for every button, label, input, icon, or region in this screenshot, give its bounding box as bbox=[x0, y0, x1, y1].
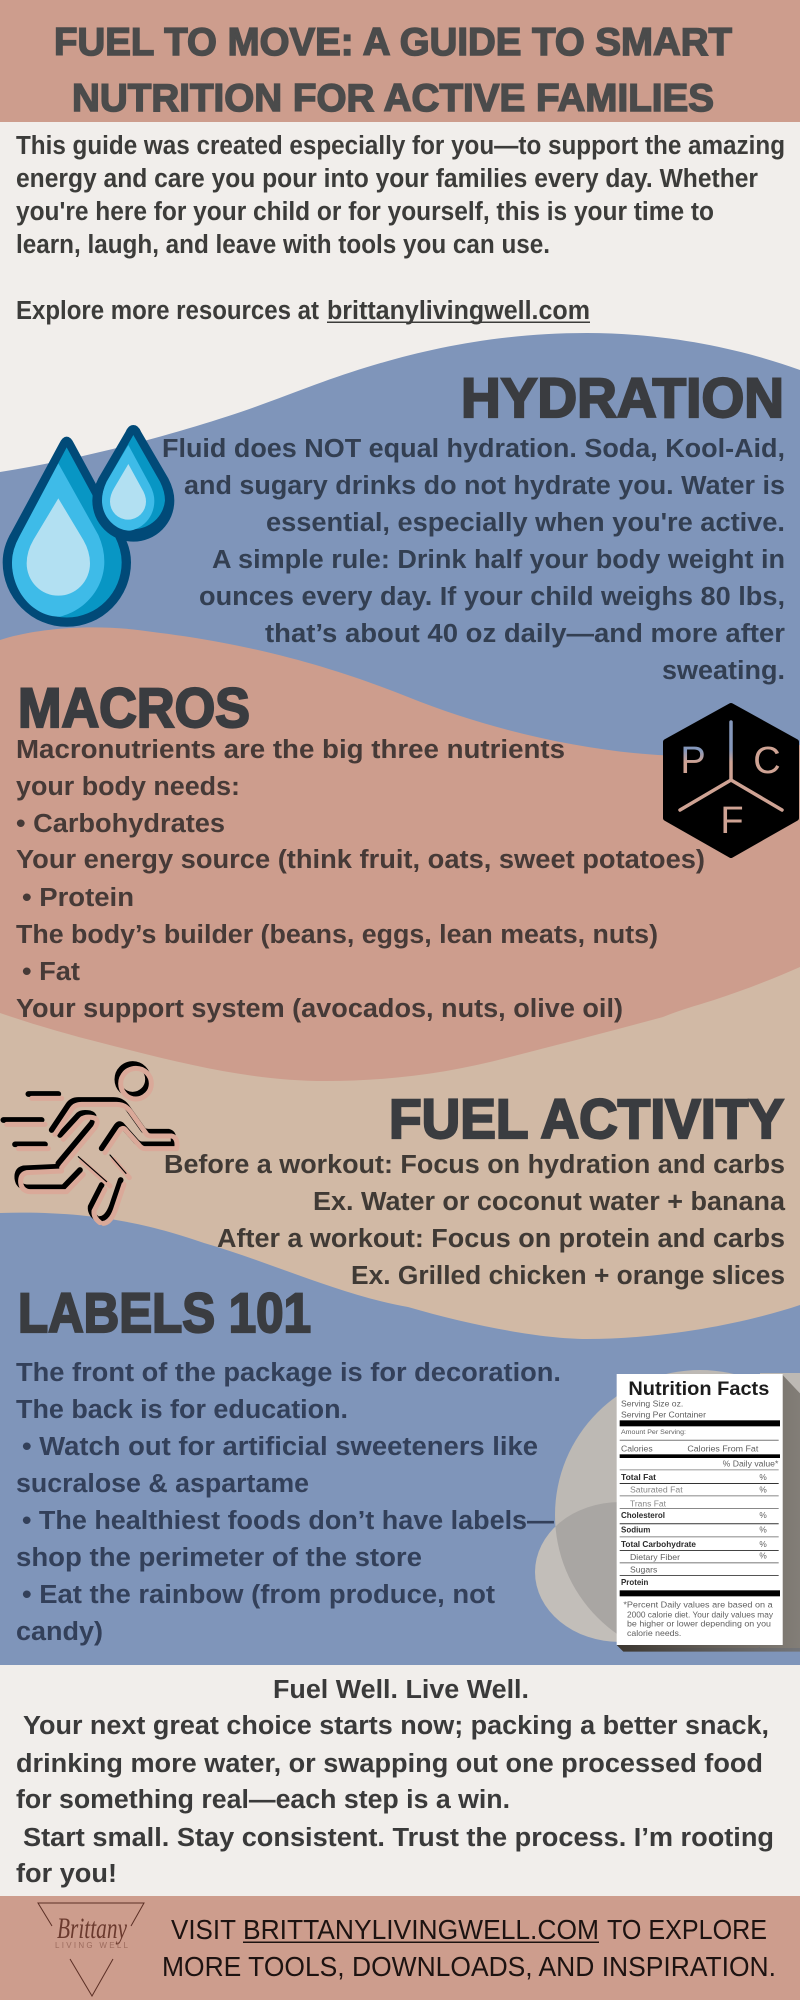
text: footer call to action: MORE TOOLS, DOWNLOADS, AND INSPIRATION. bbox=[162, 1951, 776, 1982]
heading: fuel activity: FUEL ACTIVITY bbox=[389, 1087, 784, 1150]
text: closing message: for you! bbox=[16, 1860, 117, 1888]
text: labels body: sucralose & aspartame bbox=[16, 1470, 309, 1498]
text: labels body: The front of the package is for decoration. bbox=[16, 1359, 561, 1387]
nutrition facts label: *Percent Daily values are based on a bbox=[623, 1600, 773, 1610]
wave: macros pink bbox=[0, 627, 800, 1100]
text: closing message: for something real—each step is a win. bbox=[16, 1786, 510, 1814]
text: labels body: The back is for education. bbox=[16, 1396, 348, 1424]
title bbox=[54, 21, 732, 120]
text: hydration body bbox=[162, 435, 785, 685]
text: labels body: • Eat the rainbow (from produce, not bbox=[22, 1581, 496, 1609]
intro text: energy and care you pour into your families every day. Whether bbox=[16, 165, 758, 193]
icon: macros hexagon bbox=[666, 706, 796, 855]
nutrition facts label bbox=[617, 1374, 800, 1652]
wave: labels blue bbox=[0, 1213, 800, 1665]
text: hydration body: that’s about 40 oz daily—and more after bbox=[265, 620, 785, 648]
title: FUEL TO MOVE: A GUIDE TO SMART bbox=[54, 21, 732, 64]
text: footer call to action: TO EXPLORE bbox=[607, 1914, 767, 1945]
icon: runner bbox=[3, 1064, 177, 1223]
intro text: you're here for your child or for yourself, this is your time to bbox=[16, 198, 714, 226]
intro text: brittanylivingwell.com bbox=[327, 297, 590, 325]
nutrition facts label: % bbox=[759, 1484, 767, 1494]
text: footer call to action: BRITTANYLIVINGWELL.COM bbox=[243, 1914, 599, 1945]
nutrition facts label: calorie needs. bbox=[627, 1628, 681, 1638]
nutrition facts label: Nutrition Facts bbox=[628, 1379, 769, 1400]
text: fuel activity body bbox=[164, 1151, 786, 1290]
text: macros body: Your support system (avocados, nuts, olive oil) bbox=[16, 995, 623, 1023]
text: labels body: candy) bbox=[16, 1618, 103, 1646]
nutrition facts label: Trans Fat bbox=[630, 1498, 667, 1508]
text: macros body: • Protein bbox=[22, 884, 134, 912]
logo: brittany living well: LIVING WELL bbox=[55, 1941, 129, 1950]
icon: macros hexagon: F bbox=[720, 800, 744, 842]
icon: macros hexagon: C bbox=[753, 740, 781, 782]
text: hydration body: A simple rule: Drink half your body weight in bbox=[212, 546, 785, 574]
nutrition facts label: Saturated Fat bbox=[630, 1484, 683, 1494]
wave: hydration blue bbox=[0, 333, 800, 800]
nutrition facts label: Sodium bbox=[621, 1525, 650, 1535]
heading: labels 101: LABELS 101 bbox=[18, 1281, 311, 1344]
text: macros body: Your energy source (think fruit, oats, sweet potatoes) bbox=[16, 846, 705, 874]
nutrition facts label: Sugars bbox=[630, 1565, 657, 1575]
header band bbox=[0, 0, 800, 122]
heading: macros: MACROS bbox=[18, 676, 250, 739]
text: labels body: • The healthiest foods don’t have labels— bbox=[22, 1507, 555, 1535]
logo: brittany living well bbox=[38, 1903, 144, 1996]
nutrition facts label: Dietary Fiber bbox=[630, 1552, 680, 1562]
text: macros body: • Carbohydrates bbox=[16, 810, 225, 838]
intro text bbox=[16, 132, 785, 325]
nutrition facts label: % bbox=[759, 1550, 767, 1560]
footer band bbox=[0, 1896, 800, 2000]
text: closing message: Your next great choice starts now; packing a better snack, bbox=[23, 1712, 769, 1740]
blobs behind label bbox=[535, 1370, 800, 1660]
heading: hydration: HYDRATION bbox=[461, 366, 784, 429]
nutrition facts label: Serving Per Container bbox=[621, 1409, 706, 1419]
text: fuel activity body: After a workout: Focus on protein and carbs bbox=[217, 1225, 785, 1253]
logo: brittany living well: Brittany bbox=[57, 1912, 127, 1945]
text: hydration body: ounces every day. If your child weighs 80 lbs, bbox=[199, 583, 785, 611]
text: hydration body: and sugary drinks do not hydrate you. Water is bbox=[184, 472, 785, 500]
text: closing message: Fuel Well. Live Well. bbox=[273, 1676, 529, 1704]
intro text: learn, laugh, and leave with tools you can use. bbox=[16, 231, 550, 259]
nutrition facts label: Total Fat bbox=[621, 1472, 656, 1482]
wave: fuel activity tan bbox=[0, 967, 800, 1400]
title: NUTRITION FOR ACTIVE FAMILIES bbox=[72, 77, 714, 120]
nutrition facts label: % bbox=[759, 1539, 767, 1549]
nutrition facts label: 2000 calorie diet. Your daily values may bbox=[627, 1609, 774, 1619]
text: macros body: The body’s builder (beans, eggs, lean meats, nuts) bbox=[16, 921, 658, 949]
intro text: Explore more resources at bbox=[16, 297, 319, 325]
nutrition facts label: Calories bbox=[621, 1443, 653, 1453]
nutrition facts label: Serving Size oz. bbox=[621, 1399, 683, 1409]
text: labels body bbox=[16, 1359, 561, 1646]
closing panel background bbox=[0, 1665, 800, 1896]
text: hydration body: Fluid does NOT equal hydration. Soda, Kool-Aid, bbox=[162, 435, 785, 463]
text: closing message bbox=[16, 1676, 774, 1888]
nutrition facts label: Protein bbox=[621, 1577, 648, 1587]
nutrition facts label: Total Carbohydrate bbox=[621, 1539, 696, 1549]
text: macros body bbox=[16, 736, 705, 1023]
nutrition facts label: % bbox=[759, 1472, 767, 1482]
text: labels body: • Watch out for artificial sweeteners like bbox=[22, 1433, 538, 1461]
text: footer call to action: VISIT bbox=[171, 1914, 236, 1945]
icon: macros hexagon: P bbox=[680, 740, 706, 782]
text: fuel activity body: Before a workout: Focus on hydration and carbs bbox=[164, 1151, 785, 1179]
text: hydration body: sweating. bbox=[662, 657, 785, 685]
text: closing message: Start small. Stay consistent. Trust the process. I’m rooting bbox=[23, 1824, 774, 1852]
nutrition facts label: % bbox=[759, 1510, 767, 1520]
nutrition facts label: Amount Per Serving: bbox=[621, 1429, 686, 1436]
nutrition facts label: Calories From Fat bbox=[687, 1443, 759, 1453]
text: footer call to action bbox=[162, 1914, 776, 1982]
text: macros body: Macronutrients are the big three nutrients bbox=[16, 736, 565, 764]
text: macros body: your body needs: bbox=[16, 773, 240, 801]
text: macros body: • Fat bbox=[22, 958, 81, 986]
text: closing message: drinking more water, or swapping out one processed food bbox=[16, 1750, 763, 1778]
nutrition facts label: be higher or lower depending on you bbox=[627, 1619, 771, 1629]
nutrition facts label: % Daily value* bbox=[723, 1459, 779, 1469]
nutrition facts label: % bbox=[759, 1525, 767, 1535]
icon: water drops bbox=[3, 425, 174, 627]
text: fuel activity body: Ex. Water or coconut water + banana bbox=[313, 1188, 786, 1216]
text: labels body: shop the perimeter of the store bbox=[16, 1544, 422, 1572]
nutrition facts label: Cholesterol bbox=[621, 1510, 665, 1520]
text: fuel activity body: Ex. Grilled chicken + orange slices bbox=[351, 1262, 785, 1290]
text: hydration body: essential, especially when you're active. bbox=[266, 509, 785, 537]
